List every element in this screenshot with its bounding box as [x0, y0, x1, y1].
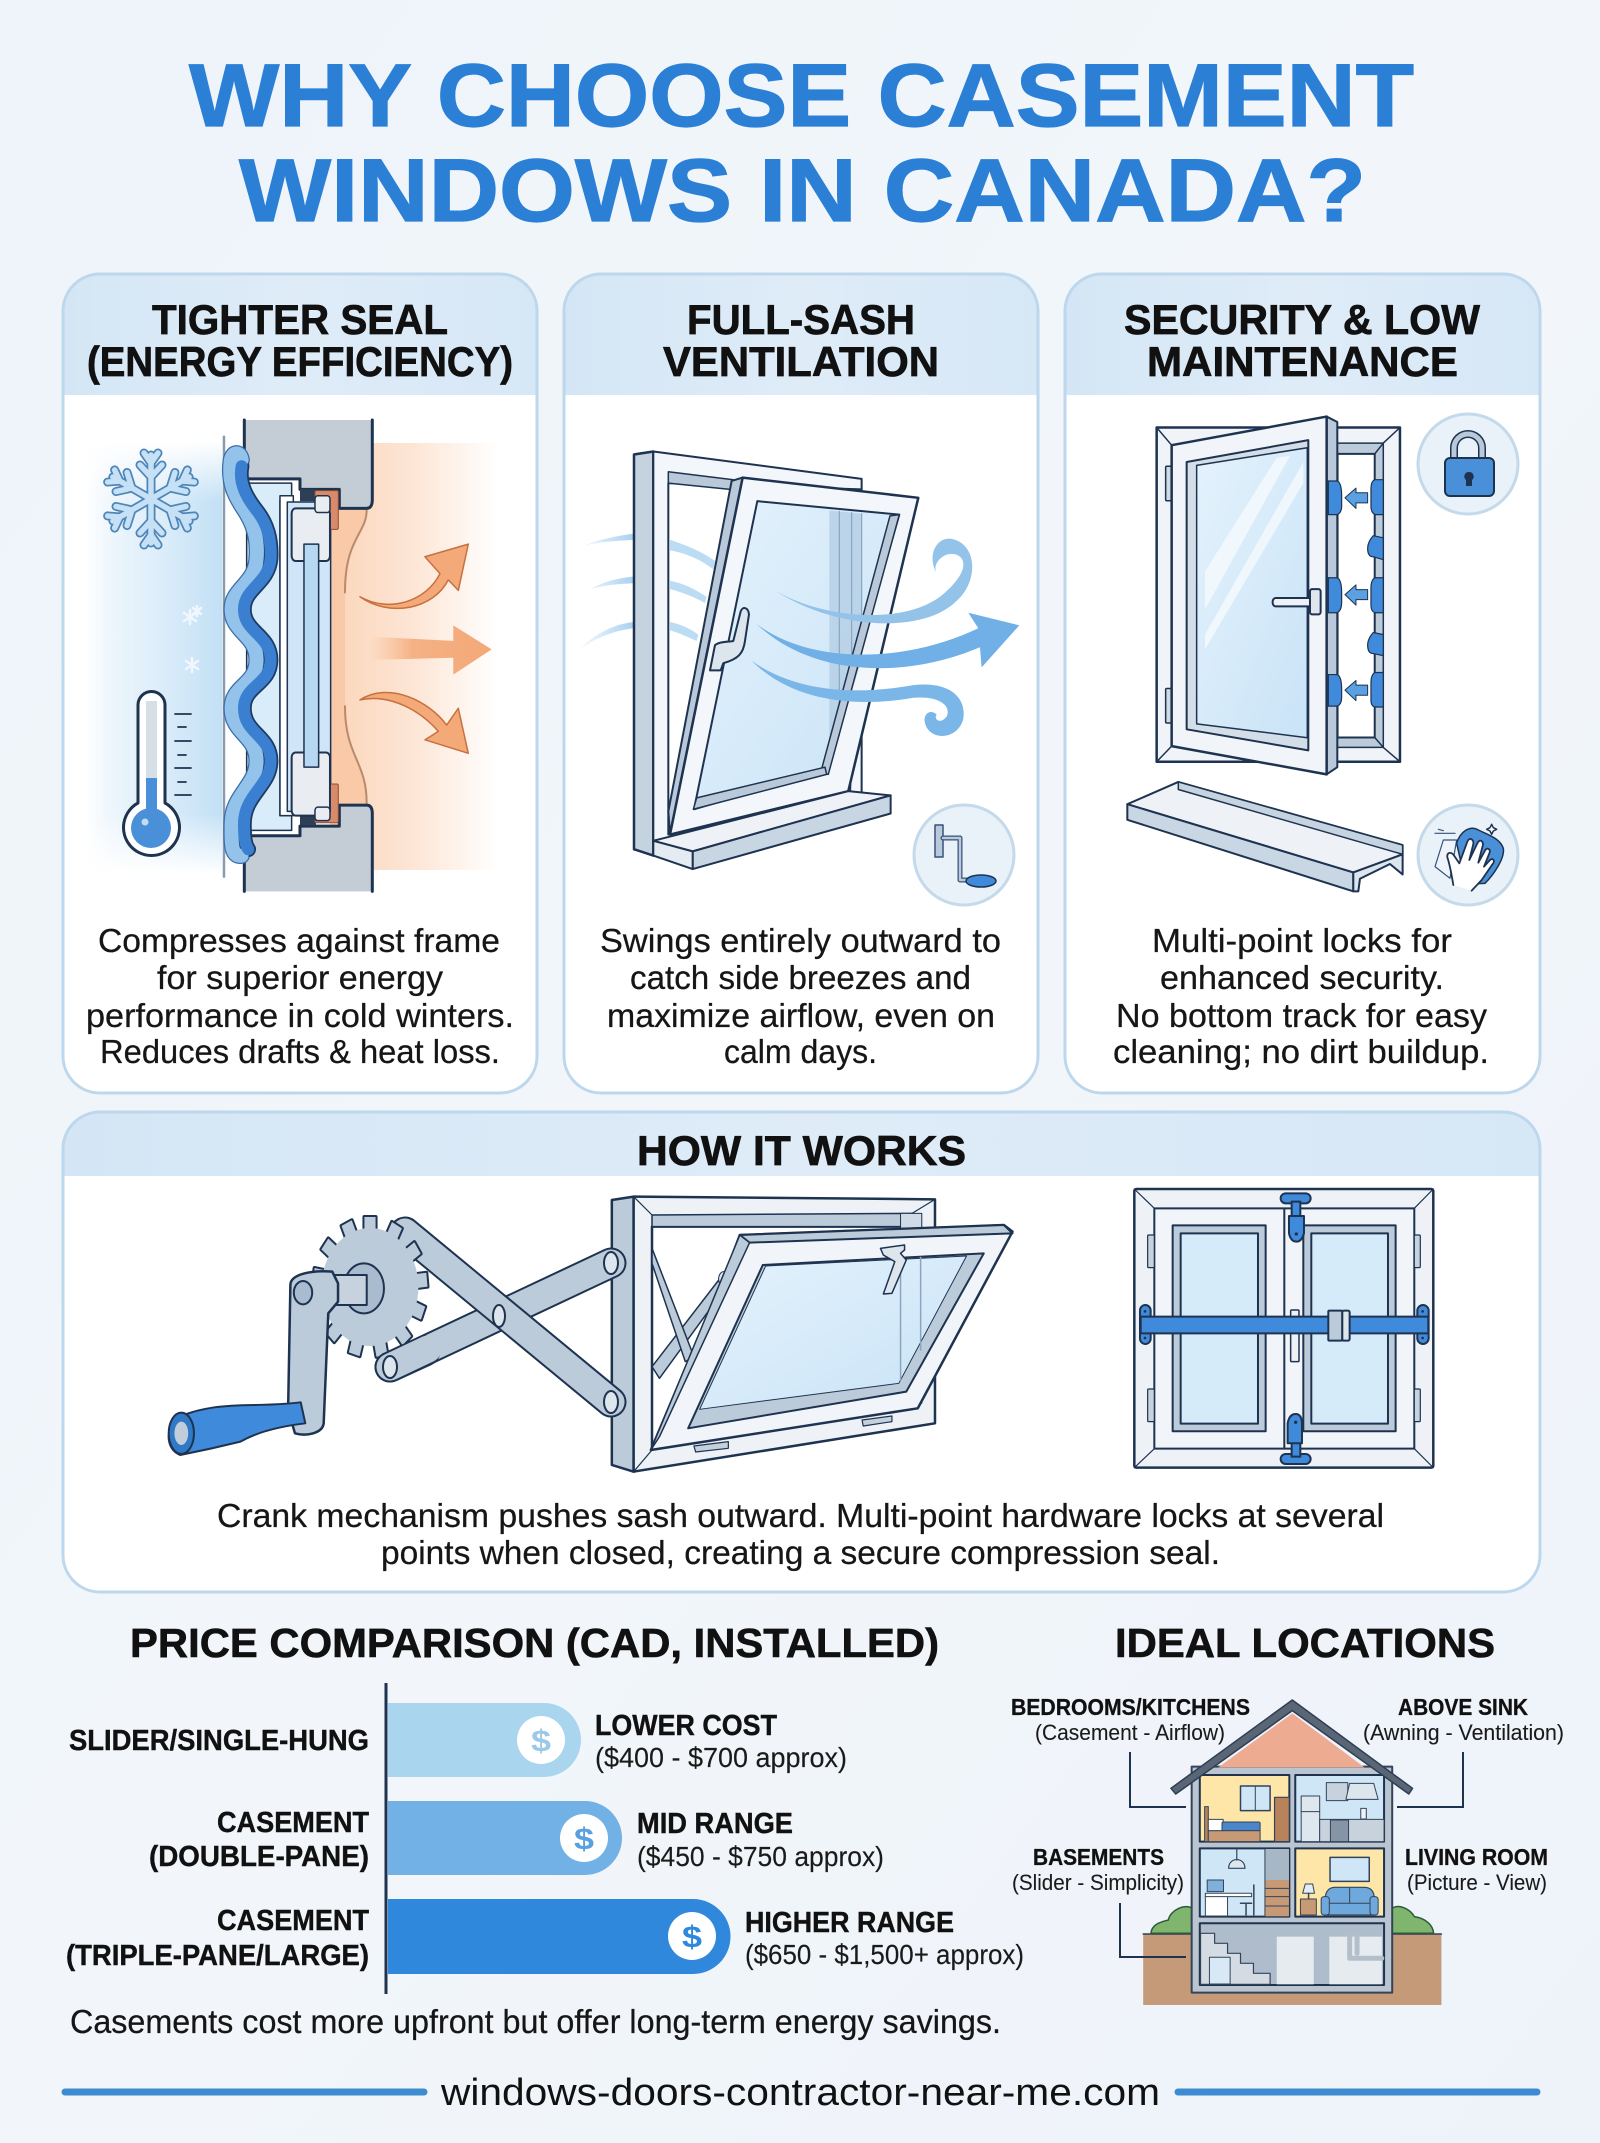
icon: thermometer [124, 692, 191, 856]
text: ventilation description [600, 922, 1001, 1070]
icon: arm end and pivots [383, 1252, 618, 1413]
leader lines [1120, 1752, 1463, 1957]
heading: price comparison: PRICE COMPARISON (CAD, INSTALLED) [130, 1620, 939, 1666]
arrow: top air swirl [772, 539, 972, 623]
illustration: sealed window cross-section [85, 420, 520, 891]
heading: security: MAINTENANCE [1147, 338, 1458, 385]
arrow: lock arrows [1345, 488, 1368, 701]
arrow: main airflow [757, 613, 1019, 668]
icon: scissor arms [390, 1232, 611, 1402]
illustration: open casement with airflow [580, 452, 1019, 869]
text: security description: Multi-point locks for [1152, 922, 1452, 959]
labels: window types: BEDROOMS/KITCHENS [1011, 1694, 1250, 1720]
heading: full-sash ventilation [663, 296, 939, 385]
labels: window types [1011, 1694, 1564, 1895]
heading: tighter seal: (ENERGY EFFICIENCY) [87, 338, 513, 385]
illustration: closed window with multi-point hardware [1134, 1189, 1433, 1468]
icon: lock points [1328, 480, 1383, 707]
bar: casement double-pane: (DOUBLE-PANE) [149, 1841, 369, 1873]
text: tighter seal description: Compresses against frame [98, 922, 500, 959]
text: ventilation description: calm days. [724, 1033, 877, 1070]
bar: slider/single-hung [69, 1703, 847, 1777]
heading: security [1124, 296, 1480, 385]
icon: gear [312, 1216, 429, 1358]
labels: window types: (Casement - Airflow) [1035, 1720, 1225, 1745]
icon: window handle [710, 608, 749, 670]
text: ventilation description: maximize airflow, even on [607, 997, 995, 1034]
labels: window types: LIVING ROOM [1405, 1844, 1548, 1870]
text: tighter seal description: performance in cold winters. [86, 997, 514, 1034]
labels: window types: (Awning - Ventilation) [1363, 1720, 1564, 1745]
labels: window types: BASEMENTS [1033, 1844, 1164, 1870]
heading: full-sash ventilation: VENTILATION [663, 338, 939, 385]
bar: slider/single-hung: ($400 - $700 approx) [595, 1742, 847, 1773]
title: WINDOWS IN CANADA? [239, 140, 1366, 240]
text: security description [1113, 922, 1489, 1070]
heading: security: SECURITY & LOW [1124, 296, 1480, 343]
illustration: crank and scissor arm opening window [169, 1197, 1012, 1472]
heading: tighter seal: TIGHTER SEAL [152, 296, 448, 343]
text: tighter seal description: Reduces drafts & heat loss. [100, 1033, 500, 1070]
bar: casement double-pane: MID RANGE [637, 1808, 793, 1840]
bar: casement triple-pane [66, 1899, 1024, 1974]
arrow: bottom air swirl [752, 661, 964, 736]
heading: ideal locations: IDEAL LOCATIONS [1115, 1620, 1495, 1666]
icon: small snow [184, 606, 201, 672]
text: how it works description [217, 1497, 1384, 1571]
bar: casement double-pane: ($450 - $750 approx) [637, 1841, 884, 1872]
arrow: heat middle [370, 625, 492, 675]
icon: padlock badge [1418, 414, 1518, 514]
arrow: heat bottom [360, 692, 468, 753]
bar: casement triple-pane: $ [682, 1919, 702, 1954]
icon: crank badge [914, 805, 1014, 905]
heading: tighter seal [87, 296, 513, 385]
text: how it works description: points when closed, creating a secure compression seal. [381, 1534, 1220, 1571]
bar: slider/single-hung: $ [531, 1723, 551, 1758]
labels: window types: ABOVE SINK [1398, 1694, 1528, 1720]
panel: full-sash ventilation [564, 274, 1038, 1093]
icon: interior handle [1273, 598, 1313, 606]
icon: cleaning badge [1418, 805, 1518, 905]
footer: website: windows-doors-contractor-near-me.com [440, 2072, 1160, 2114]
icon: snowflake [106, 453, 196, 545]
chart: price comparison bars [66, 1683, 1024, 1994]
panel: tighter seal [63, 274, 537, 1093]
text: tighter seal description [86, 922, 514, 1070]
bar: casement triple-pane: ($650 - $1,500+ approx) [745, 1939, 1024, 1970]
title: WHY CHOOSE CASEMENT [189, 45, 1414, 145]
panel: how it works [63, 1112, 1540, 1592]
icon: crank handle [169, 1263, 384, 1455]
illustration: cutaway house [1143, 1700, 1441, 2005]
bar: casement triple-pane: CASEMENT [217, 1905, 369, 1937]
text: ventilation description: catch side breezes and [630, 959, 971, 996]
labels: window types: (Slider - Simplicity) [1012, 1870, 1184, 1895]
heading: how it works: HOW IT WORKS [637, 1127, 966, 1174]
text: how it works description: Crank mechanism pushes sash outward. Multi-point hardware locks at several [217, 1497, 1384, 1534]
icon: compressed gasket [230, 453, 271, 856]
title [189, 45, 1414, 240]
labels: window types: (Picture - View) [1407, 1870, 1547, 1895]
bar: slider/single-hung: SLIDER/SINGLE-HUNG [69, 1725, 369, 1757]
text: tighter seal description: for superior energy [157, 959, 444, 996]
text: security description: cleaning; no dirt buildup. [1113, 1033, 1489, 1070]
text: security description: enhanced security. [1160, 959, 1444, 996]
bar: casement double-pane [149, 1801, 884, 1875]
bar: casement double-pane: CASEMENT [217, 1807, 369, 1839]
bar: slider/single-hung: LOWER COST [595, 1710, 777, 1742]
text: security description: No bottom track for easy [1116, 997, 1488, 1034]
text: ventilation description: Swings entirely outward to [600, 922, 1001, 959]
diagram: ideal locations house [1011, 1694, 1564, 2005]
heading: full-sash ventilation: FULL-SASH [687, 296, 915, 343]
bar: casement double-pane: $ [574, 1821, 594, 1856]
panel: security and low maintenance [1065, 274, 1540, 1093]
arrow: heat top [360, 544, 468, 608]
bar: casement triple-pane: (TRIPLE-PANE/LARGE) [66, 1940, 369, 1972]
illustration: window with multi-point locks [1127, 417, 1403, 891]
text: price note: Casements cost more upfront but offer long-term energy savings. [70, 2003, 1001, 2040]
bar: casement triple-pane: HIGHER RANGE [745, 1907, 954, 1939]
illustration: trackless sill [1127, 782, 1403, 872]
